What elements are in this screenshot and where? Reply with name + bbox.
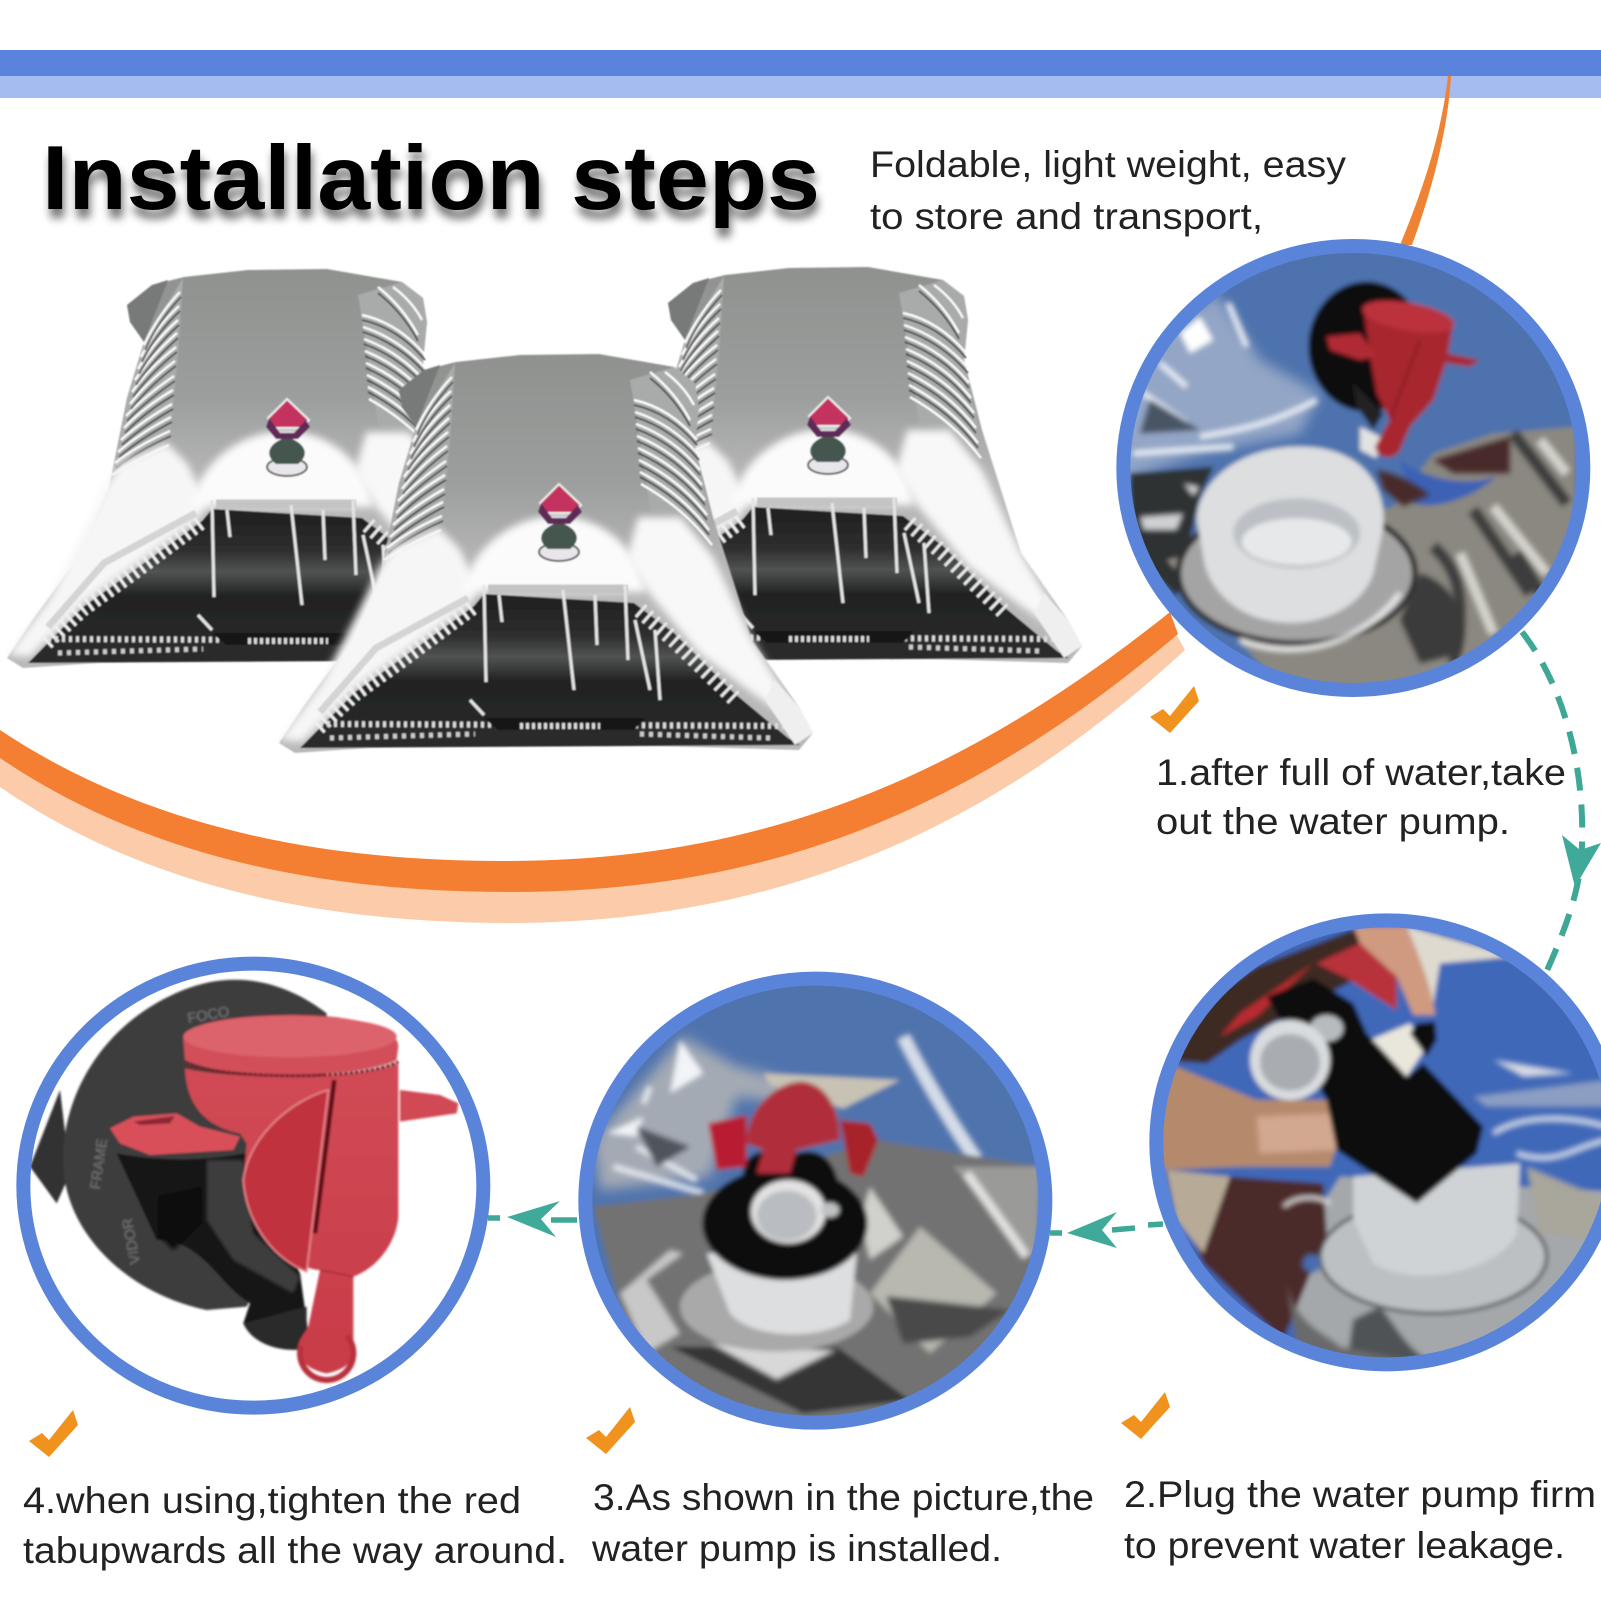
step 1 caption: 1.after full of water,take	[1156, 752, 1566, 793]
step 4 caption: 4.when using,tighten the red	[23, 1480, 521, 1521]
front bag	[279, 354, 813, 753]
check mark 4	[29, 1410, 78, 1457]
step 3 caption: water pump is installed.	[591, 1528, 1002, 1569]
step 2 caption: to prevent water leakage.	[1124, 1525, 1565, 1566]
dashed arrow: step 3 to step 4	[488, 1201, 577, 1237]
step 4 photo circle	[23, 964, 483, 1408]
check mark 2	[1121, 1392, 1170, 1439]
step 3 photo circle	[570, 960, 1070, 1440]
dashed arrow: step 2 to step 3	[1050, 1212, 1163, 1248]
step 4 photo circle: FOCO	[186, 1004, 231, 1027]
subtitle text: Foldable, light weight, easy	[870, 144, 1347, 185]
step 1 caption: out the water pump.	[1156, 801, 1510, 842]
orange swoosh curve	[0, 76, 1451, 923]
step 2 photo circle	[1140, 900, 1601, 1387]
step 3 caption	[586, 1407, 1094, 1569]
subtitle text: to store and transport,	[870, 196, 1263, 237]
top banner bars	[0, 50, 1601, 98]
water bags product photo	[7, 267, 1082, 753]
title: Installation steps	[42, 128, 820, 229]
check mark 1	[1150, 686, 1199, 733]
step 3 caption: 3.As shown in the picture,the	[593, 1477, 1094, 1518]
back right bag	[548, 267, 1082, 666]
subtitle text	[870, 144, 1347, 237]
dashed arrow: step 1 to step 2	[1522, 632, 1601, 975]
step 4 caption: tabupwards all the way around.	[23, 1530, 567, 1571]
step 2 caption	[1121, 1392, 1596, 1566]
step 2 caption: 2.Plug the water pump firm	[1124, 1474, 1596, 1515]
step 1 caption	[1150, 686, 1566, 842]
back left bag	[7, 269, 541, 668]
step 4 caption	[23, 1410, 567, 1571]
step 1 photo circle	[1116, 239, 1590, 697]
check mark 3	[586, 1407, 635, 1454]
step 4 photo circle: VIDOR	[120, 1217, 144, 1265]
step 4 photo circle: FRAME	[88, 1137, 111, 1191]
